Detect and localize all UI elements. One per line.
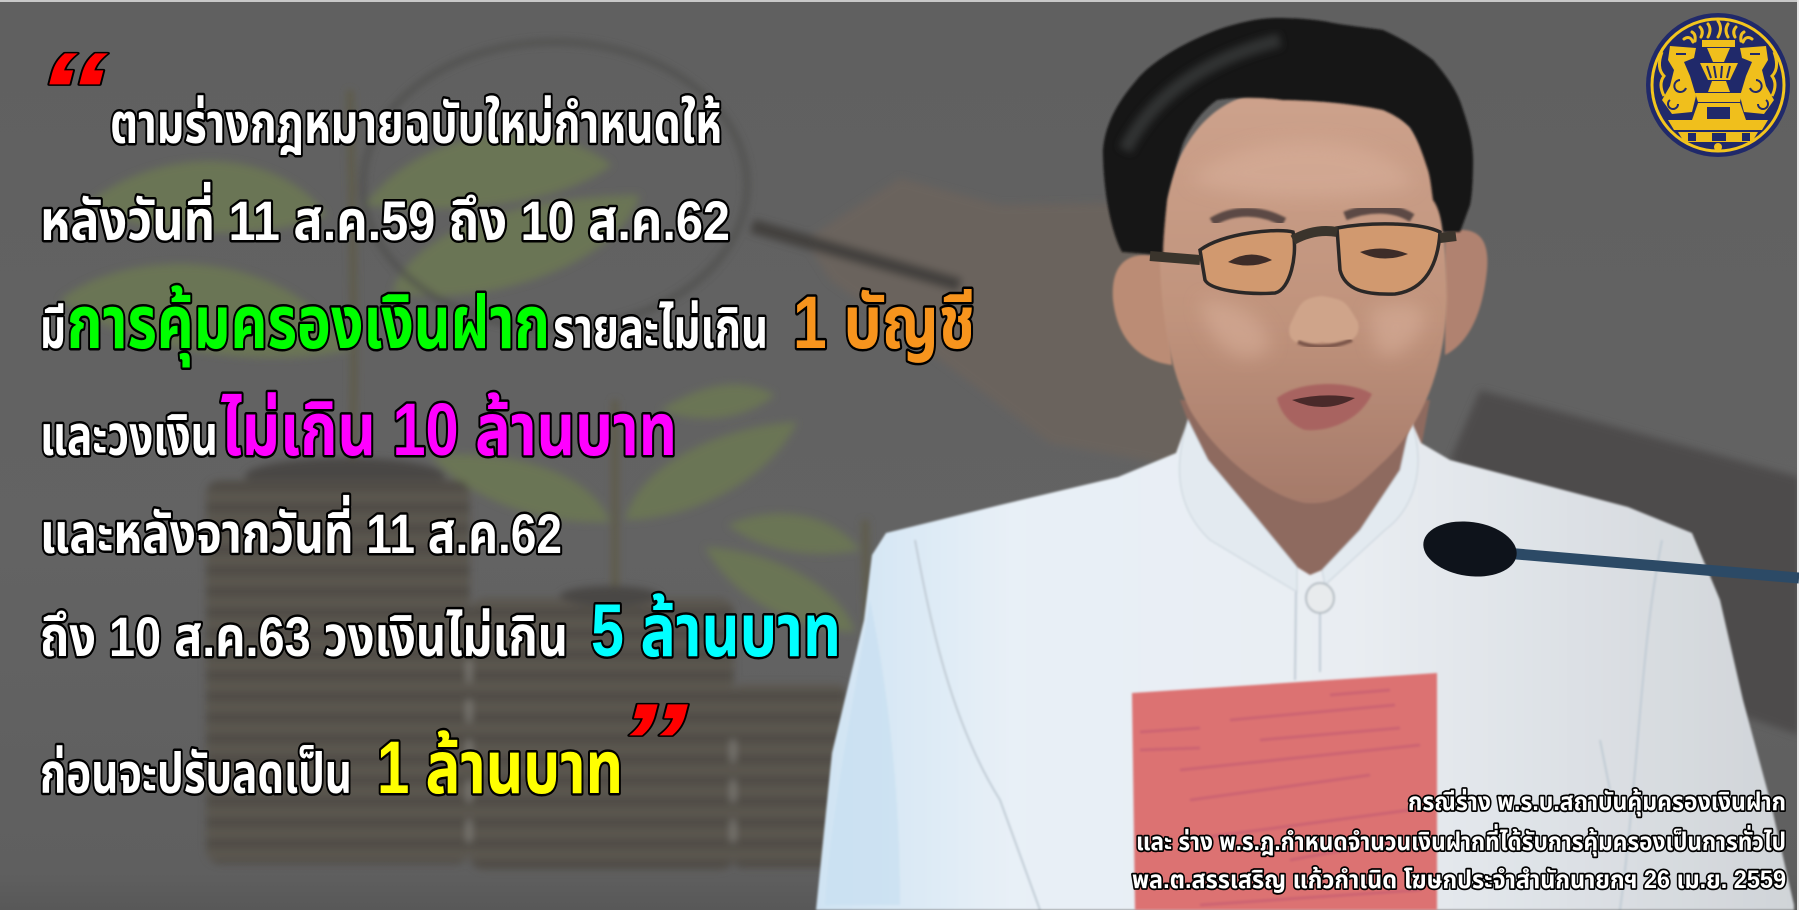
nostril shadow (1298, 340, 1352, 347)
hair sheen (1125, 40, 1280, 150)
face (1160, 95, 1447, 503)
gold ring (1652, 19, 1784, 151)
green highlight: การคุ้มครองเงินฝาก (67, 281, 550, 368)
line 1: ตามร่างกฎหมายฉบับใหม่กำหนดให้ (110, 92, 722, 155)
quote text block (40, 92, 975, 809)
closing quotation mark: ” (616, 681, 688, 804)
line 3 (40, 281, 975, 368)
magnifier ring (363, 42, 747, 328)
line 5: และหลังจากวันที่ 11 ส.ค.62 (40, 494, 562, 565)
base flower (1714, 143, 1722, 151)
microphone head (1420, 516, 1520, 582)
mouth (1277, 384, 1372, 430)
opening quotation mark: “ (36, 30, 108, 153)
left guardian lion (1659, 46, 1696, 114)
line 7 (40, 726, 623, 809)
line 4 (40, 388, 677, 471)
line 6 lead: ถึง 10 ส.ค.63 วงเงินไม่เกิน (40, 605, 568, 668)
portrait: speaker (816, 18, 1799, 910)
pedestal panel (1707, 107, 1730, 119)
sleeve (1450, 390, 1799, 735)
seal disc (1646, 13, 1790, 157)
red document (1132, 673, 1437, 910)
logo: government seal (1646, 13, 1790, 157)
flame ornament (1684, 21, 1752, 42)
white suit jacket (816, 420, 1794, 910)
line 6 (40, 589, 841, 672)
nose (1289, 296, 1359, 344)
line 3 lead: มี (40, 297, 66, 360)
line 2: หลังวันที่ 11 ส.ค.59 ถึง 10 ส.ค.62 (40, 181, 730, 252)
top edge strip (0, 0, 1799, 2)
hair (1103, 18, 1473, 255)
coin stacks (206, 458, 846, 870)
orange highlight: 1 บัญชี (793, 281, 975, 364)
base panels (1688, 133, 1750, 141)
leaves (60, 134, 860, 632)
teeth (1292, 395, 1355, 407)
magnifier handle (752, 226, 960, 285)
cyan highlight: 5 ล้านบาท (591, 589, 841, 672)
right edge strip (1797, 0, 1799, 910)
yellow highlight: 1 ล้านบาท (377, 726, 623, 809)
jacket fold lines (915, 540, 1662, 910)
microphone stem (1505, 553, 1799, 578)
magenta highlight: ไม่เกิน 10 ล้านบาท (221, 388, 677, 471)
face highlights (1190, 141, 1425, 358)
line 7 lead: ก่อนจะปรับลดเป็น (40, 742, 352, 805)
temples and bridge (1150, 231, 1456, 260)
neck (1180, 400, 1430, 580)
ears (1113, 230, 1487, 365)
line 3 middle: รายละไม่เกิน (553, 297, 768, 360)
sleeve shading (825, 600, 900, 905)
plant stems (350, 90, 868, 650)
eyebrows (1212, 209, 1412, 222)
collar (1179, 420, 1418, 592)
ceremonial bowls and pedestal (1668, 40, 1768, 142)
eyes (1228, 248, 1408, 266)
collar button (1306, 583, 1334, 613)
hand holding magnifier (805, 178, 1200, 470)
bowl fluting (1707, 66, 1730, 78)
line 4 lead: และวงเงิน (40, 404, 218, 467)
right guardian lion (1740, 46, 1777, 114)
glasses (1150, 224, 1456, 294)
document handwriting (1140, 690, 1420, 905)
source credit (1132, 788, 1786, 894)
